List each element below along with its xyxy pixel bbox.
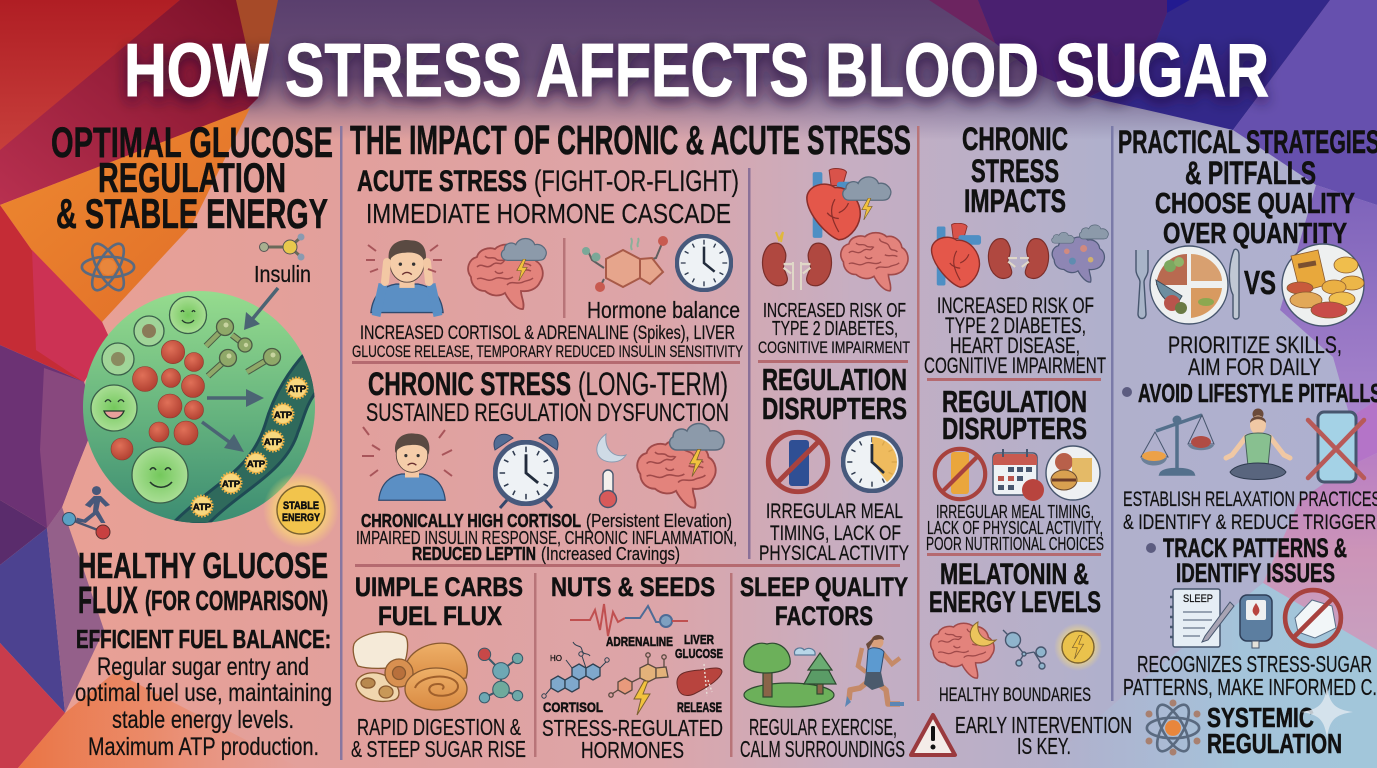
glucose balls: [111, 340, 204, 460]
text: chronic effects: IMPAIRED INSULIN RESPONSE, CHRONIC INFLAMMATION,: [356, 528, 737, 548]
text: risks: COGNITIVE IMPAIRMENT: [758, 338, 910, 357]
icon: bolt: [634, 681, 650, 715]
icon: phone crossed out: [1308, 412, 1364, 482]
text: efficient fuel balance: Maximum ATP production.: [88, 733, 319, 761]
icon: heart and storm: [807, 169, 891, 240]
text: efficient fuel balance: stable energy levels.: [112, 706, 294, 734]
labels: hormones: RELEASE: [677, 699, 722, 715]
icon: heart: [932, 223, 981, 287]
icon: adrenaline molecule: [609, 653, 668, 697]
icon: energy: [1054, 623, 1102, 671]
icon: healthy plate: [1150, 246, 1228, 324]
text: risks: TYPE 2 DIABETES,: [772, 318, 898, 340]
diagram: glucose disc: ATP: [264, 437, 283, 448]
panel: sleep quality: [740, 572, 908, 762]
text: prioritize skills: AIM FOR DAILY: [1188, 354, 1321, 381]
heading: healthy glucose flux: FLUX: [78, 580, 138, 622]
heading: optimal glucose: [51, 119, 333, 237]
heading: chronic stress: (LONG-TERM): [578, 366, 728, 402]
heading: optimal glucose: REGULATION: [98, 154, 286, 201]
heading: chronic stress: CHRONIC STRESS: [368, 366, 571, 402]
insulin keys: [206, 318, 280, 376]
diagram: glucose disc: ATP: [193, 502, 212, 513]
heading: chronic stress: [366, 366, 729, 427]
heading: FACTORS: [775, 601, 873, 631]
heading: healthy glucose flux: (FOR COMPARISON): [145, 585, 328, 616]
icon: warning: [911, 715, 955, 755]
icon: park: [744, 643, 836, 707]
column dividers: [340, 126, 1114, 760]
icon: carb molecule: [478, 648, 523, 703]
icon: cortisol molecule: [542, 642, 609, 698]
panel: simple carbs: [351, 572, 526, 762]
icon: atom: [1146, 700, 1200, 756]
icon: junk food plate: [1046, 446, 1100, 500]
text: irregular meal timing: IRREGULAR MEAL: [766, 500, 903, 523]
panel: practical strategies: [1118, 124, 1377, 759]
heading: NUTS & SEEDS: [551, 572, 715, 602]
text: risks: INCREASED RISK OF: [763, 300, 906, 322]
heading: healthy glucose flux: HEALTHY GLUCOSE: [78, 545, 328, 586]
text: & STEEP SUGAR RISE: [351, 736, 526, 762]
icon: hormone molecule: [582, 236, 668, 292]
icon: runner: [845, 635, 904, 707]
heading: [355, 572, 523, 631]
text: risks: HEART DISEASE,: [950, 333, 1080, 358]
heading: regulation disrupters: DISRUPTERS: [942, 411, 1087, 446]
heading: regulation disrupters: REGULATION: [942, 384, 1087, 419]
heading: impact: THE IMPACT OF CHRONIC & ACUTE STRESS: [350, 117, 911, 163]
icon: kidneys: [988, 239, 1049, 278]
blood vessel with ATP: [172, 352, 316, 524]
bullet: track patterns: [1146, 533, 1347, 588]
heading: acute stress: (FIGHT-OR-FLIGHT): [534, 165, 739, 198]
labels: hormones: GLUCOSE: [675, 646, 723, 661]
heading: & PITFALLS: [1185, 155, 1316, 191]
icon: cortisol molecule: HO: [550, 654, 562, 663]
heading: regulation disrupters: DISRUPTERS: [762, 391, 907, 426]
text: disrupters: POOR NUTRITIONAL CHOICES: [926, 534, 1104, 554]
heading: acute stress: ACUTE STRESS: [357, 165, 527, 198]
diagram: glucose disc: ATP: [274, 410, 293, 421]
icon: runner on molecule: [62, 486, 110, 539]
text: disrupters: [926, 502, 1104, 554]
text: acute effects: [352, 323, 743, 361]
heading: UIMPLE CARBS: [355, 572, 523, 602]
icon: processed food plate: [1282, 244, 1364, 326]
heading: melatonin: [929, 558, 1101, 619]
icon: no sugar cubes: [1285, 590, 1341, 646]
text: chronic effects: [356, 511, 737, 564]
text: chronic effects: (Persistent Elevation): [586, 511, 732, 531]
icon: alarm clock: [494, 434, 558, 508]
text: recognizes: [1123, 651, 1377, 700]
text: [955, 712, 1132, 759]
heading: chronic stress: SUSTAINED REGULATION DYSFUNCTION: [366, 399, 729, 427]
text: acute effects: INCREASED CORTISOL & ADRENALINE (Spikes), LIVER: [360, 323, 735, 344]
icon: pulse line: [570, 604, 688, 636]
heading: systemic regulation: SYSTEMIC: [1207, 702, 1314, 733]
heading: optimal glucose: & STABLE ENERGY: [56, 190, 328, 237]
label: healthy boundaries: HEALTHY BOUNDARIES: [939, 685, 1091, 706]
label: vs: VS: [1244, 264, 1276, 301]
text: irregular meal timing: PHYSICAL ACTIVITY: [759, 542, 909, 565]
heading: STRESS: [971, 153, 1059, 189]
heading: regulation disrupters: [942, 384, 1087, 446]
heading: [1118, 124, 1377, 250]
text: irregular meal timing: TIMING, LACK OF: [770, 522, 901, 545]
icon: stable energy badge: STABLE: [283, 500, 319, 512]
icon: tired person: [362, 427, 452, 500]
icon: calendar: [993, 449, 1044, 501]
text: IS KEY.: [1017, 733, 1071, 759]
callout: early intervention: [911, 712, 1132, 759]
heading: FUEL FLUX: [378, 601, 502, 631]
heading: systemic regulation: [1207, 702, 1342, 759]
text: CALM SURROUNDINGS: [740, 736, 905, 762]
heading: SLEEP QUALITY: [740, 572, 908, 602]
icon: no energy drink: [768, 432, 828, 492]
icon: kidneys: [763, 232, 831, 290]
text: chronic effects: REDUCED LEPTIN: [412, 544, 536, 564]
icon: sparkle: [1301, 686, 1353, 738]
heading: IMPACTS: [964, 183, 1066, 219]
icon: brain with storm cloud: [637, 424, 724, 508]
text: chronic effects: (Increased Cravings): [541, 544, 680, 564]
panel: impact of chronic and acute stress: [350, 117, 911, 763]
heading: CHRONIC: [962, 121, 1068, 157]
text: efficient fuel balance: [75, 624, 332, 761]
text: REGULAR EXERCISE,: [749, 714, 897, 740]
heading: healthy glucose flux: [78, 545, 328, 622]
icon: no energy drink: [935, 449, 985, 499]
text: chronic effects: CHRONICALLY HIGH CORTISOL: [361, 511, 581, 531]
heading: acute stress: [357, 165, 739, 229]
diagram: glucose disc: ATP: [247, 459, 266, 470]
heading: melatonin: MELATONIN &: [940, 558, 1089, 591]
panel: chronic stress impacts: [924, 121, 1108, 706]
text: efficient fuel balance: Regular sugar entry and: [97, 653, 309, 681]
icon: meditating person: [1226, 408, 1290, 480]
text: RAPID DIGESTION &: [357, 714, 521, 740]
icon: liver: [677, 664, 722, 696]
icon: injured brain: [841, 233, 908, 291]
text: risks: INCREASED RISK OF: [937, 293, 1094, 318]
text: risks: TYPE 2 DIABETES,: [945, 313, 1086, 338]
heading: [740, 572, 908, 631]
icon: stable energy badge: [263, 472, 339, 548]
heading: regulation disrupters: [762, 362, 907, 426]
text: prioritize skills: [1168, 332, 1342, 381]
text: efficient fuel balance: optimal fuel use, maintaining: [75, 679, 332, 707]
icon: moon and thermometer: [597, 434, 626, 508]
icon: stable energy badge: ENERGY: [282, 512, 321, 524]
heading: optimal glucose: OPTIMAL GLUCOSE: [51, 119, 333, 167]
diagram: glucose disc: [83, 288, 316, 524]
heading: melatonin: ENERGY LEVELS: [929, 586, 1101, 619]
icon: knife: [1229, 249, 1239, 319]
text: risks: [758, 300, 910, 357]
labels: hormones: ADRENALINE: [606, 634, 673, 649]
text: disrupters: LACK OF PHYSICAL ACTIVITY,: [927, 518, 1103, 538]
heading: regulation disrupters: REGULATION: [762, 362, 907, 397]
text: risks: COGNITIVE IMPAIRMENT: [924, 353, 1106, 378]
icon: insulin molecule: [260, 234, 304, 260]
diagram: glucose disc: ATP: [222, 479, 241, 490]
icon: glucose meter: [1240, 595, 1272, 648]
icon: brain with storm cloud: [468, 239, 546, 309]
heading: [962, 121, 1068, 219]
panel: optimal glucose regulation: [51, 119, 339, 761]
text: EARLY INTERVENTION: [955, 712, 1132, 738]
icon: stressed person: [366, 240, 443, 316]
text: [740, 714, 905, 762]
text: [351, 714, 526, 762]
text: efficient fuel balance: EFFICIENT FUEL BALANCE:: [76, 624, 331, 654]
labels: hormones: [543, 632, 723, 715]
icon: clock: [843, 433, 901, 491]
icon: fork: [1136, 250, 1148, 318]
text: HORMONES: [581, 737, 684, 763]
text: disrupters: IRREGULAR MEAL TIMING,: [936, 502, 1094, 522]
icon: brain with clouds: [1052, 225, 1108, 282]
label: hormone balance: Hormone balance: [587, 297, 740, 323]
labels: hormones: LIVER: [684, 632, 714, 647]
text: [542, 715, 723, 763]
diagram: glucose disc: ATP: [288, 384, 307, 395]
icon: sleep notebook: SLEEP: [1183, 593, 1213, 605]
text: risks: [924, 293, 1106, 378]
arrows: [202, 288, 278, 452]
icon: clock: [677, 236, 731, 290]
icon: brain with moon: [931, 622, 996, 678]
text: acute effects: GLUCOSE RELEASE, TEMPORARY REDUCED INSULIN SENSITIVITY: [352, 342, 743, 361]
text: establish relaxation: [1123, 488, 1377, 534]
icon: melatonin molecule: [1003, 630, 1046, 669]
happy cells: [91, 296, 206, 503]
labels: hormones: CORTISOL: [543, 699, 603, 715]
icon: balance scale: [1141, 415, 1214, 474]
heading: acute stress: IMMEDIATE HORMONE CASCADE: [366, 198, 731, 229]
panel: nuts and seeds: [542, 572, 723, 763]
icon: sleep notebook: [1170, 589, 1234, 647]
text: STRESS-REGULATED: [542, 715, 723, 741]
label: insulin: Insulin: [254, 261, 311, 287]
icon: atom: [82, 239, 134, 295]
icon: breads: [353, 632, 467, 710]
text: irregular meal timing: [759, 500, 909, 565]
